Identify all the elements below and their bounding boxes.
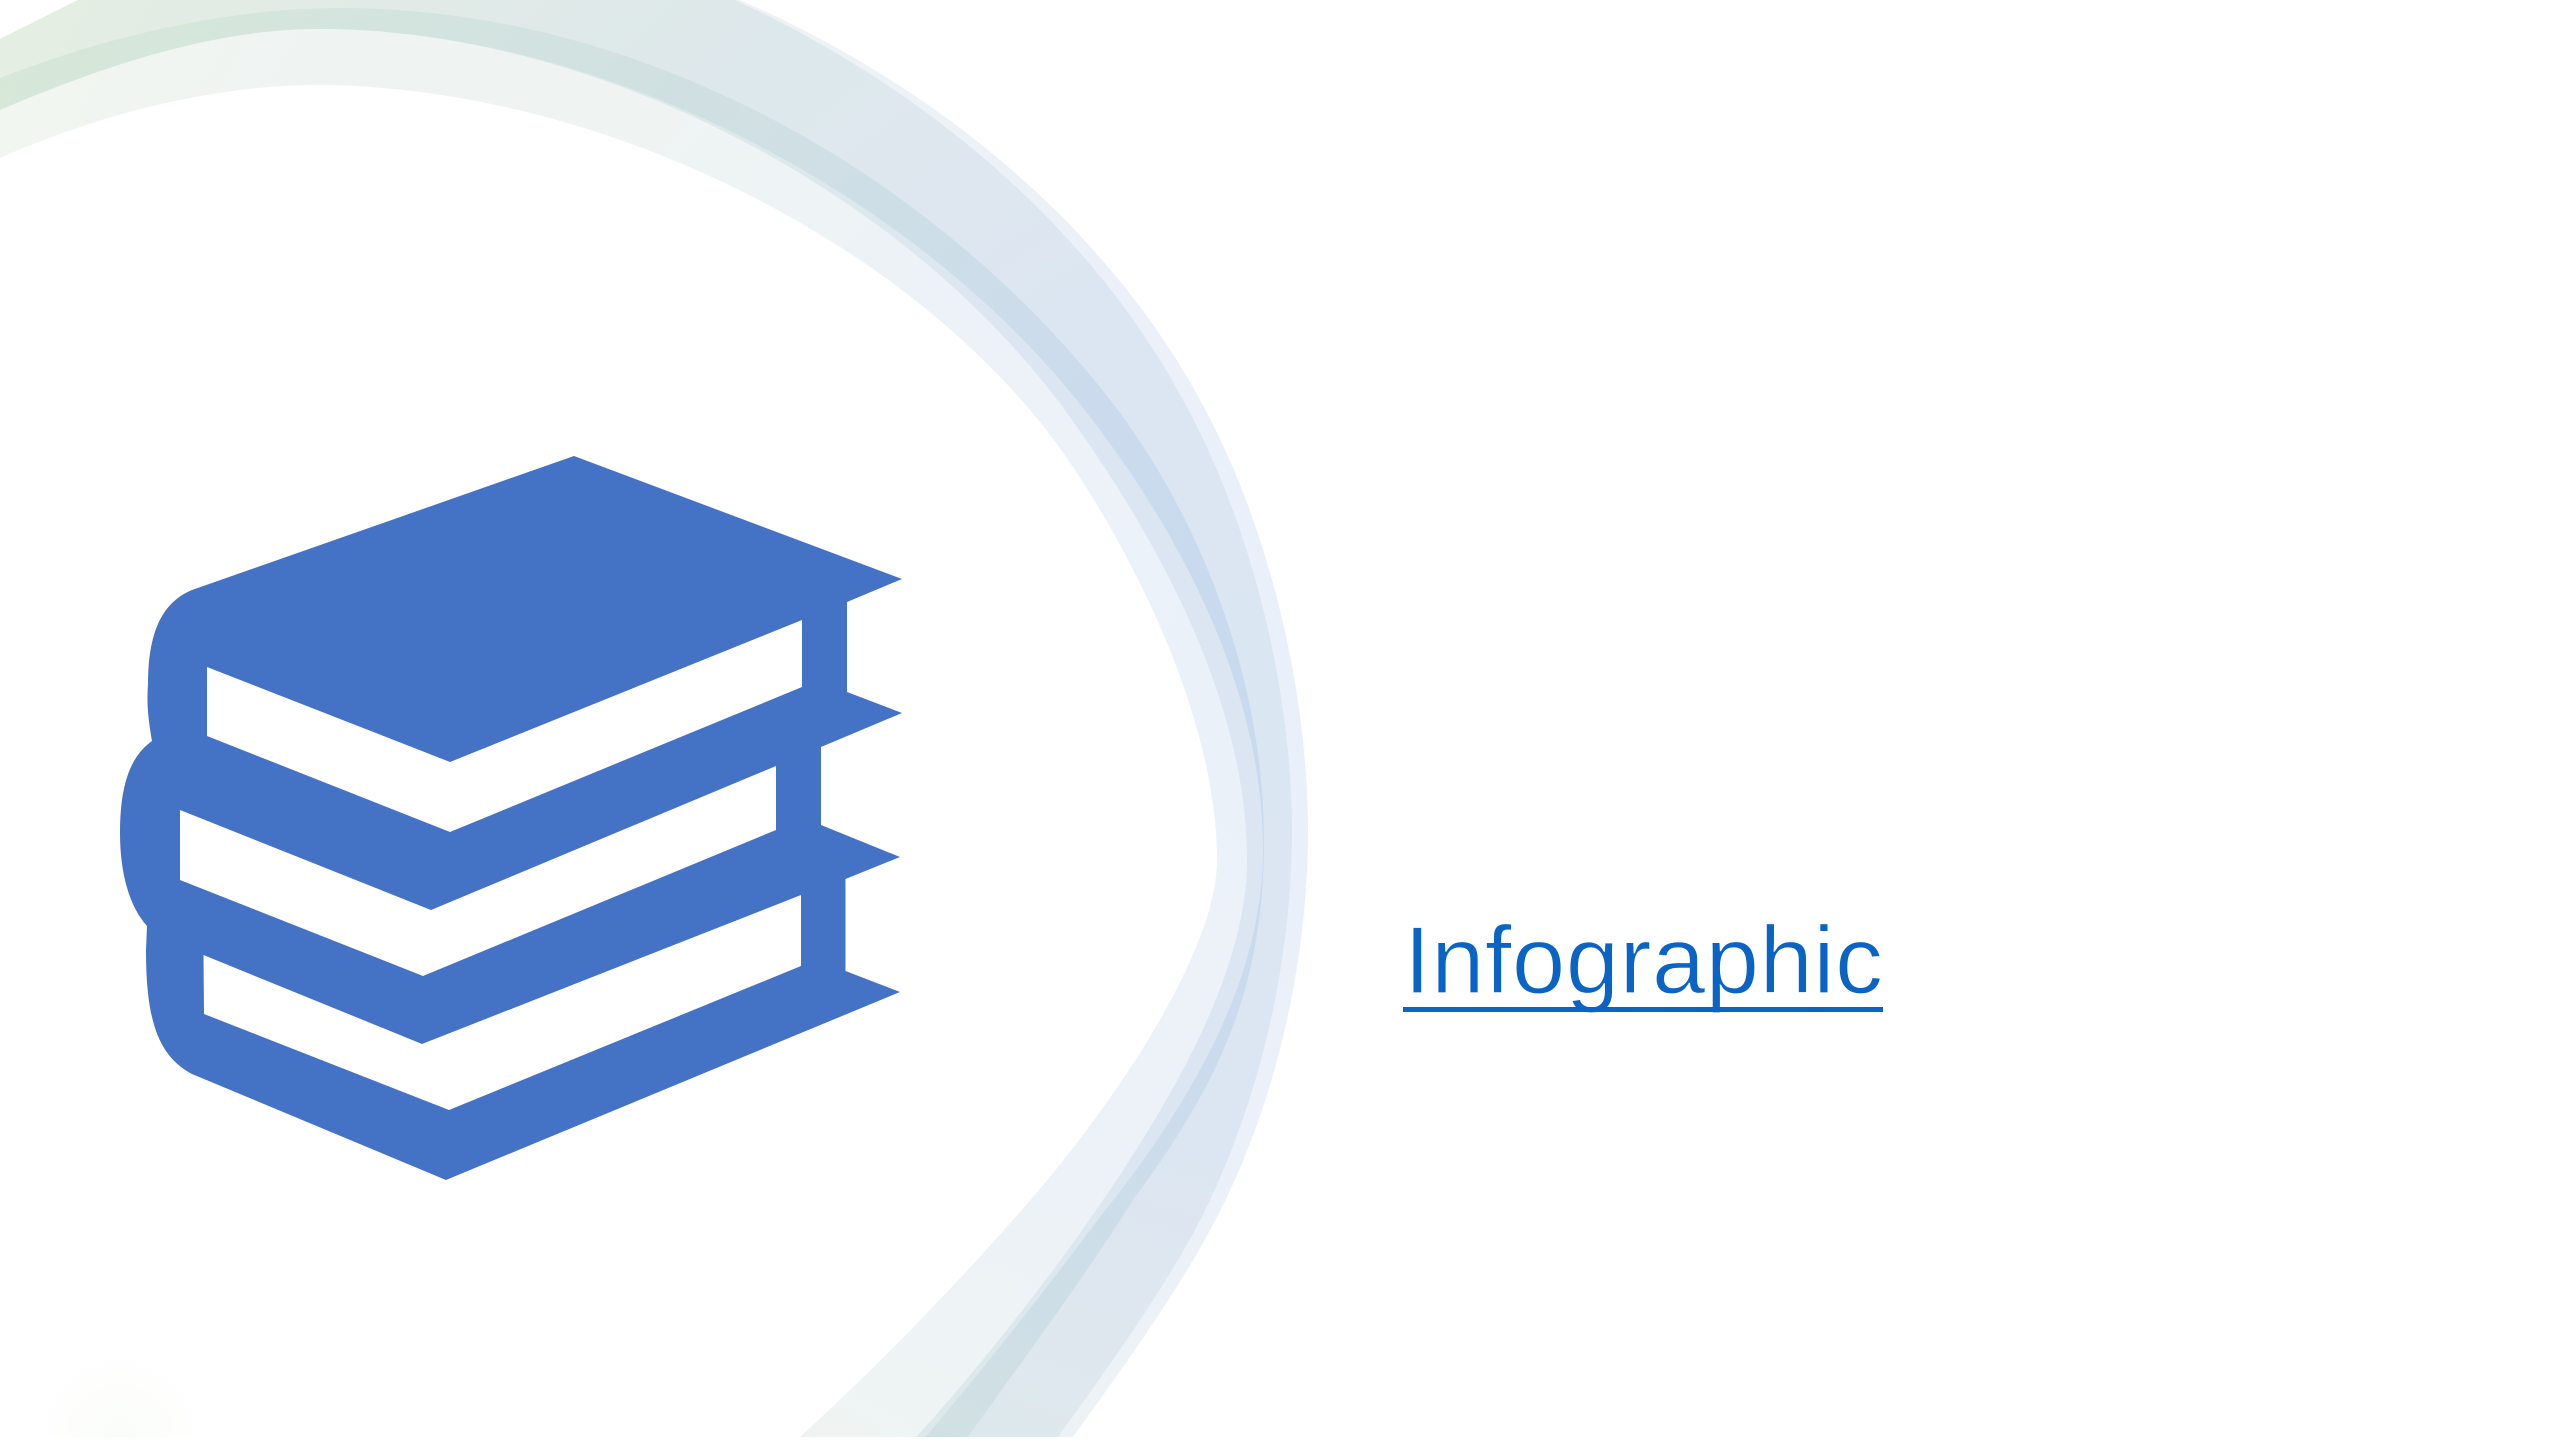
swoosh: darker crease	[0, 8, 1264, 1440]
icon: stack of books	[120, 456, 902, 1180]
swoosh: white interior	[0, 85, 1217, 1440]
decorative swoosh arc	[0, 0, 1308, 1440]
swoosh: inner blue sliver	[0, 29, 1263, 1440]
swoosh: outer band	[0, 0, 1292, 1440]
swoosh: faint corner tint	[30, 1347, 210, 1437]
swoosh: pale outer rim	[0, 0, 1308, 1440]
title: Infographic link text: Infographic	[1404, 907, 1883, 1014]
swoosh: pale inner band	[0, 29, 1247, 1440]
